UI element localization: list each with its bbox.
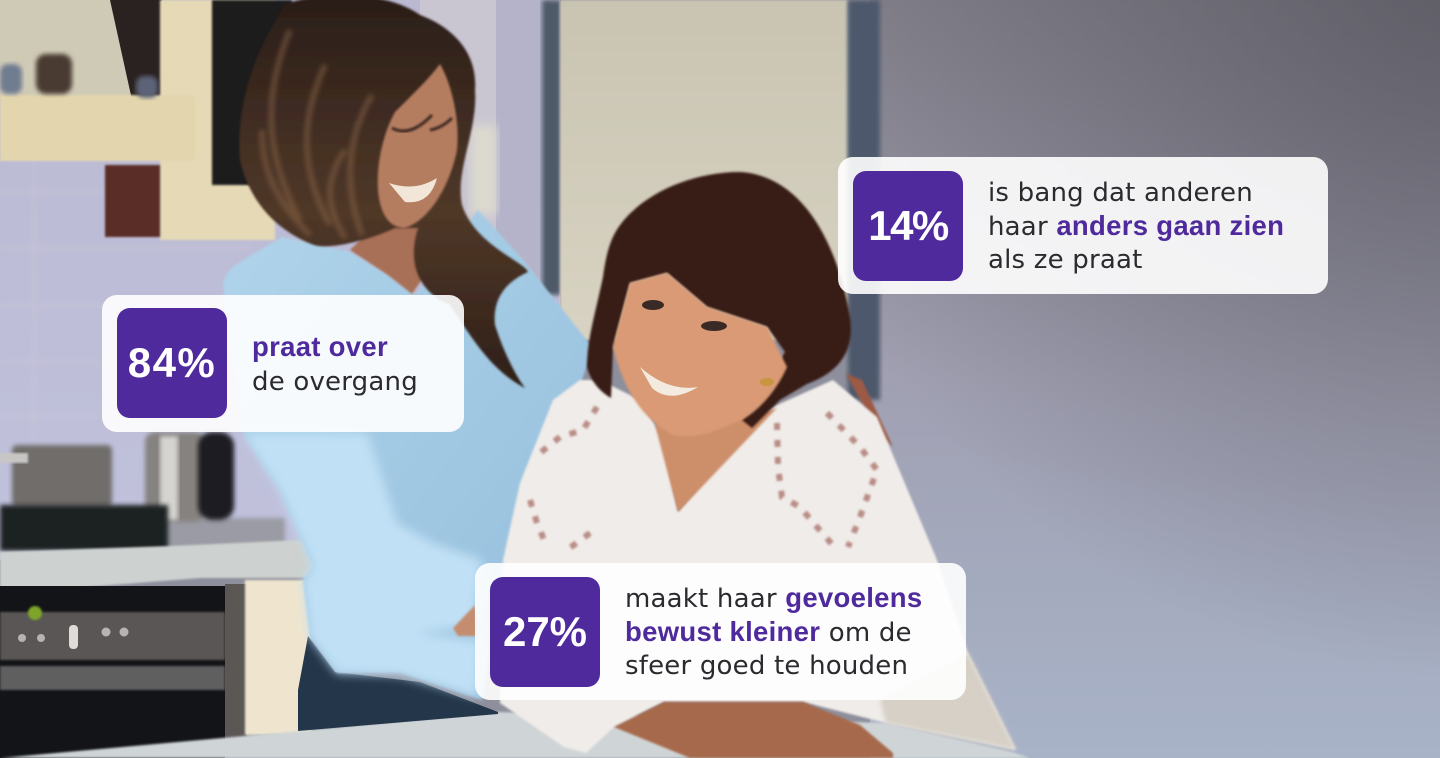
daughter: blouse <box>223 210 593 700</box>
daughter: face <box>378 64 458 228</box>
text: 84% description: praat over <box>252 331 388 362</box>
stat badge: 14% <box>853 171 963 281</box>
callout: 84% <box>102 295 464 432</box>
stat badge: 84% <box>117 308 227 418</box>
mother: earring <box>760 378 774 386</box>
daughter: eye shadow <box>392 115 452 131</box>
text: 27% description <box>625 582 922 681</box>
text: 14% description: haar anders gaan zien <box>988 210 1284 242</box>
daughter: smile <box>389 178 437 202</box>
stat badge: 27% <box>490 577 600 687</box>
table top <box>0 712 1030 758</box>
mother: neck and chest <box>655 408 777 512</box>
stat badge: 14%: 14% <box>868 202 948 249</box>
mother: eyes <box>642 300 727 331</box>
text: 84% description: de overgang <box>252 366 418 396</box>
daughter: blouse sleeve <box>243 433 482 697</box>
wall and cabinet backdrop <box>0 0 880 560</box>
text: 27% description: bewust kleiner om de <box>625 616 912 648</box>
daughter: hand at hip <box>453 605 478 636</box>
mother: hair <box>587 172 851 428</box>
text: 14% description: is bang dat anderen <box>988 178 1253 208</box>
daughter: neck and chest <box>350 218 425 294</box>
mother: forearm and hand <box>614 702 893 758</box>
mother: smile <box>640 367 698 396</box>
mother: sweater <box>500 380 1016 753</box>
daughter: hand on shoulder <box>846 374 893 447</box>
callout: 14% <box>838 157 1328 294</box>
callout: 27% <box>475 563 966 700</box>
daughter: hair <box>239 0 528 388</box>
text: 27% description: maakt haar gevoelens <box>625 582 922 614</box>
stat badge: 84%: 84% <box>128 339 216 386</box>
daughter: jeans <box>298 636 498 731</box>
stove and counter <box>0 432 318 758</box>
stat badge: 27%: 27% <box>503 608 587 655</box>
text: 14% description <box>988 178 1284 275</box>
text: 27% description: sfeer goed te houden <box>625 651 908 681</box>
text: 14% description: als ze praat <box>988 245 1143 275</box>
wall <box>870 0 1440 758</box>
mother: face <box>613 273 787 436</box>
text: 84% description <box>252 331 418 396</box>
